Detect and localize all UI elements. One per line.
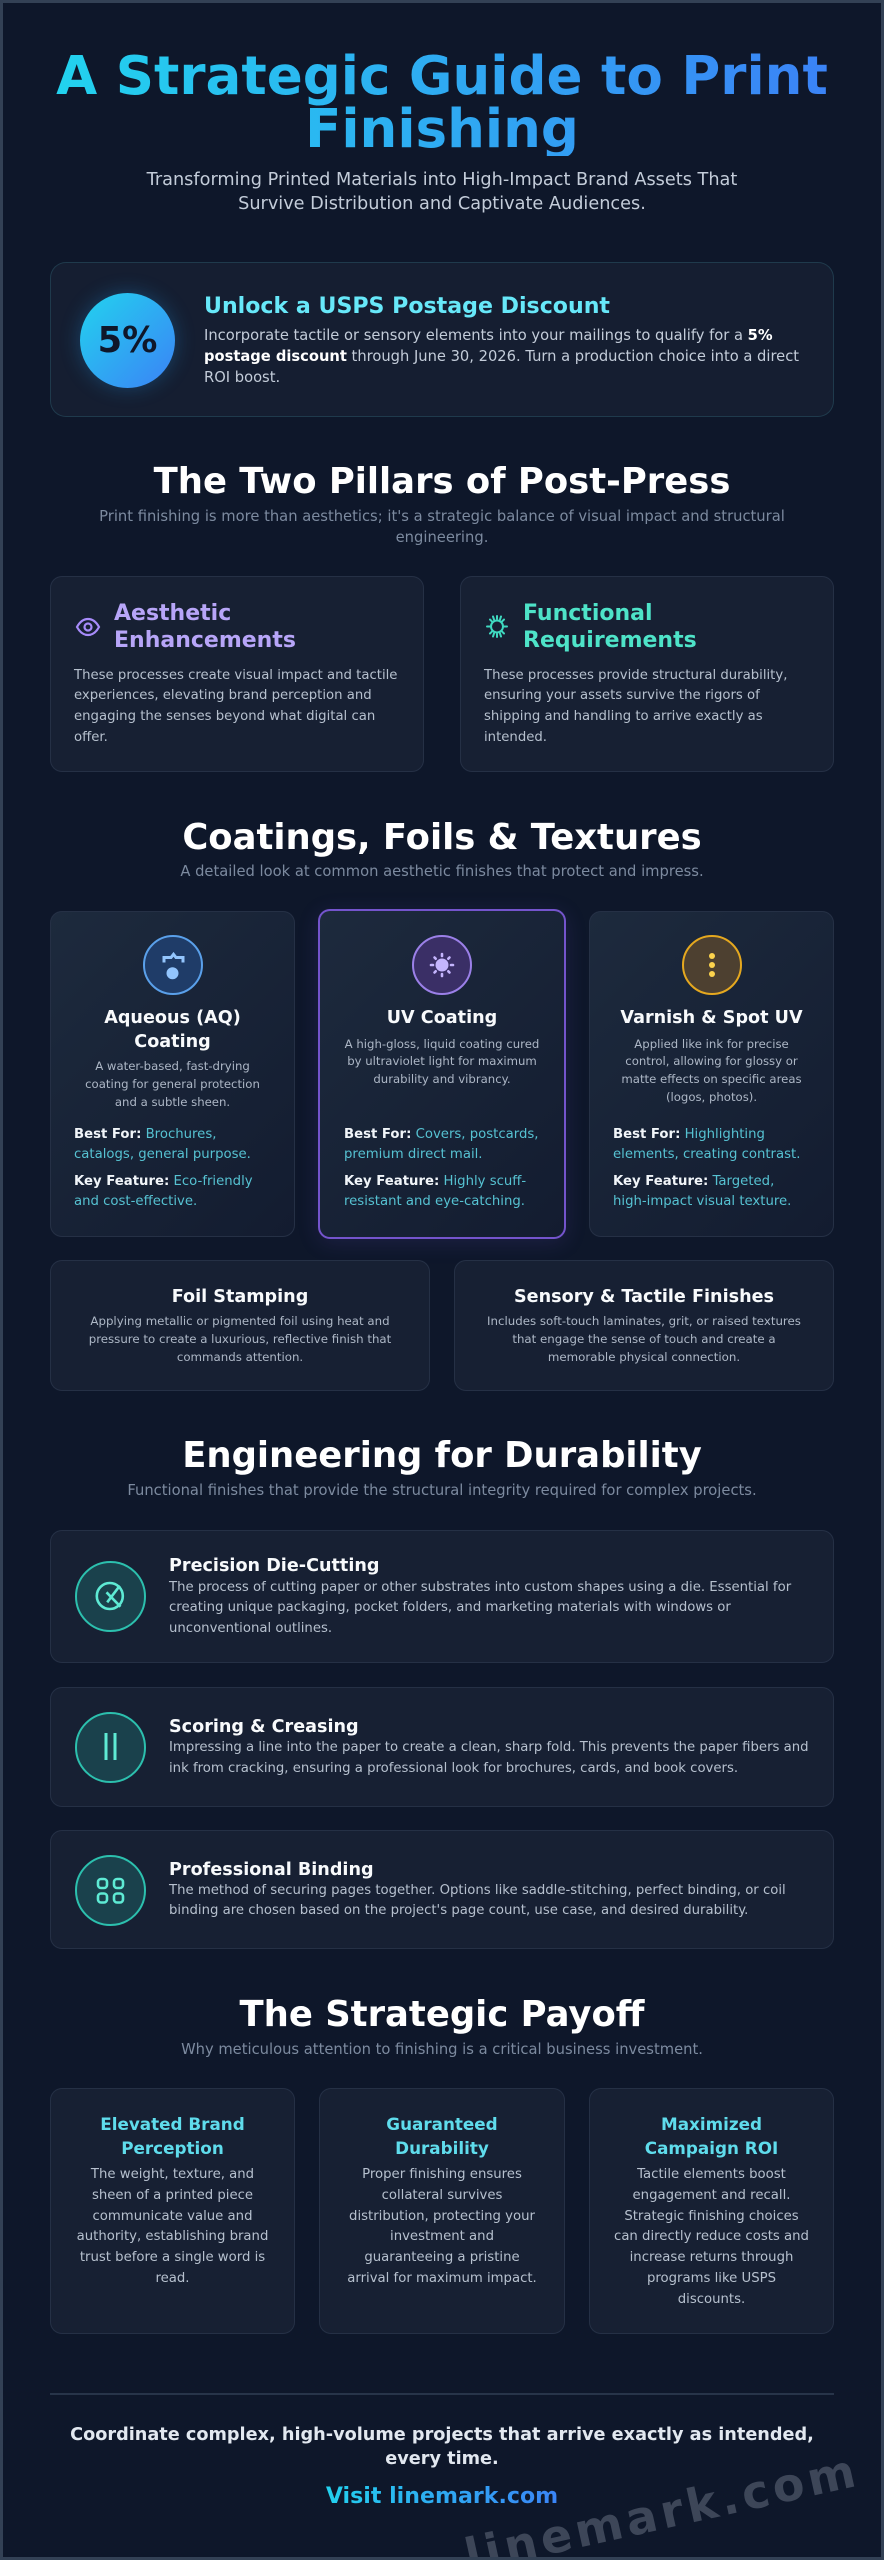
promo text: postage discount through June 30, 2026. Turn a production choice into a direct — [204, 348, 799, 365]
best for: premium direct mail. — [344, 1147, 483, 1162]
benefit text: engagement and recall. — [633, 2188, 790, 2203]
benefit text: discounts. — [678, 2292, 745, 2307]
card description: A water-based, fast-drying — [95, 1059, 250, 1073]
badge: 5 percent: 5% — [98, 320, 157, 361]
closing statement: every time. — [385, 2449, 499, 2469]
pillar text: These processes create visual impact and tactile — [74, 668, 397, 683]
pillar heading: Enhancements — [114, 628, 296, 652]
card description — [487, 1314, 801, 1364]
card description — [344, 1036, 539, 1086]
item text — [169, 1740, 809, 1776]
card title: UV Coating — [387, 1008, 497, 1028]
pillar heading: Functional — [523, 601, 653, 626]
panel: campaign ROI — [589, 2088, 834, 2334]
section intro: two pillars: Print finishing is more than aesthetics; it's a strategic balance of visual impact and structural — [99, 508, 785, 525]
card description: control, allowing for glossy or — [625, 1054, 798, 1068]
card description: memorable physical connection. — [548, 1350, 740, 1364]
benefit text: guaranteeing a pristine — [364, 2250, 520, 2265]
badge: 5 percent — [80, 293, 175, 388]
pillar text: shipping and handling to arrive exactly as — [484, 709, 763, 724]
item text: binding are chosen based on the project's page count, use case, and desired durability. — [169, 1903, 748, 1918]
benefit text: trust before a single word is — [80, 2250, 265, 2265]
card description: that engage the sense of touch and create a — [512, 1332, 776, 1346]
item text: The method of securing pages together. Options like saddle-stitching, perfect binding, or coil — [169, 1883, 786, 1898]
card description: Includes soft-touch laminates, grit, or raised textures — [487, 1314, 801, 1328]
best for — [344, 1127, 538, 1162]
icon: die cut — [75, 1561, 146, 1632]
panel: USPS postage discount — [50, 262, 834, 417]
benefit text: Proper finishing ensures — [362, 2167, 522, 2182]
card description: pressure to create a luxurious, reflective finish that — [89, 1332, 391, 1346]
best for: Best For: Highlighting — [613, 1127, 765, 1142]
benefit text: investment and — [390, 2229, 494, 2244]
promo heading: Unlock a USPS Postage Discount — [204, 293, 610, 319]
card title: Coating — [134, 1032, 211, 1052]
pillar heading — [114, 601, 296, 652]
panel: scoring — [50, 1687, 834, 1807]
pillar text — [74, 668, 397, 745]
key feature — [613, 1174, 791, 1209]
card title: Foil Stamping — [172, 1287, 308, 1307]
panel: functional requirements — [460, 576, 834, 772]
best for — [613, 1127, 800, 1162]
icon: eye — [76, 618, 100, 636]
benefit title — [386, 2114, 498, 2158]
pillar text: intended. — [484, 730, 547, 745]
title — [50, 50, 834, 156]
section intro: two pillars — [99, 508, 785, 546]
benefit title: Guaranteed — [386, 2114, 498, 2134]
item text: The process of cutting paper or other substrates into custom shapes using a die. Essential for — [169, 1580, 791, 1595]
key feature: Key Feature: Highly scuff- — [344, 1174, 526, 1189]
benefit text: The weight, texture, and — [91, 2167, 254, 2182]
promo text: ROI boost. — [204, 369, 280, 386]
call to action: Visit linemark.com — [326, 2483, 558, 2509]
item title: Professional Binding — [169, 1860, 374, 1880]
benefit title: Elevated Brand — [100, 2114, 245, 2134]
benefit text: collateral survives — [382, 2188, 502, 2203]
best for: Best For: Covers, postcards, — [344, 1127, 538, 1142]
key feature: Key Feature: Targeted, — [613, 1174, 774, 1189]
panel: die-cutting — [50, 1530, 834, 1663]
benefit text: read. — [155, 2271, 190, 2286]
icon: sun — [412, 935, 472, 995]
card description: matte effects on specific areas — [621, 1072, 802, 1086]
panel: aqueous coating — [50, 911, 295, 1237]
subtitle — [146, 170, 737, 214]
item text: ink from cracking, ensuring a professional look for brochures, cards, and book covers. — [169, 1761, 738, 1776]
benefit text — [347, 2167, 537, 2286]
benefit text: sheen of a printed piece — [92, 2188, 253, 2203]
section intro: payoff: Why meticulous attention to finishing is a critical business investment. — [181, 2040, 703, 2058]
pillar text: These processes provide structural durability, — [484, 668, 787, 683]
benefit text: programs like USPS — [647, 2271, 776, 2286]
pillar text: offer. — [74, 730, 108, 745]
panel: sensory finishes — [454, 1260, 834, 1391]
card description: Applying metallic or pigmented foil using heat and — [90, 1314, 390, 1328]
icon: water — [143, 935, 203, 995]
subtitle: Transforming Printed Materials into High-Impact Brand Assets That — [147, 170, 737, 190]
panel: durability benefit — [319, 2088, 565, 2334]
card description: coating for general protection — [85, 1077, 260, 1091]
benefit text — [77, 2167, 268, 2286]
pillar heading — [523, 601, 697, 652]
key feature — [74, 1174, 253, 1209]
heading: payoff: The Strategic Payoff — [240, 1994, 644, 2035]
card title: Aqueous (AQ) — [104, 1008, 241, 1028]
benefit text: Strategic finishing choices — [624, 2209, 799, 2224]
key feature — [344, 1174, 526, 1209]
benefit text: authority, establishing brand — [77, 2229, 268, 2244]
benefit text: distribution, protecting your — [349, 2209, 535, 2224]
benefit text — [614, 2167, 809, 2307]
key feature: resistant and eye-catching. — [344, 1194, 525, 1209]
pillar text — [484, 668, 787, 745]
card description: (logos, photos). — [666, 1090, 757, 1104]
promo text — [204, 327, 799, 386]
closing statement: Coordinate complex, high-volume projects that arrive exactly as intended, — [70, 2425, 814, 2445]
benefit title: Durability — [395, 2138, 489, 2158]
pillar text: experiences, elevating brand perception and — [74, 688, 372, 703]
best for — [74, 1127, 251, 1162]
benefit text: increase returns through — [630, 2250, 793, 2265]
item text: Impressing a line into the paper to create a clean, sharp fold. This prevents the paper fibers and — [169, 1740, 809, 1755]
icon: crease lines — [75, 1712, 146, 1783]
closing statement — [70, 2425, 814, 2469]
benefit title — [645, 2114, 778, 2158]
benefit text: can directly reduce costs and — [614, 2229, 809, 2244]
benefit text: Tactile elements boost — [637, 2167, 786, 2182]
card title: Sensory & Tactile Finishes — [514, 1287, 774, 1307]
item text — [168, 1580, 792, 1636]
key feature: and cost-effective. — [74, 1194, 197, 1209]
key feature: high-impact visual texture. — [613, 1194, 791, 1209]
item title: Scoring & Creasing — [169, 1717, 359, 1737]
panel: foil stamping — [50, 1260, 430, 1391]
pillar heading: Aesthetic — [114, 601, 231, 626]
card description: Applied like ink for precise — [634, 1036, 789, 1050]
panel: varnish and spot UV — [589, 911, 834, 1237]
benefit title — [100, 2114, 245, 2158]
icon: dots — [682, 935, 742, 995]
benefit text: arrival for maximum impact. — [347, 2271, 537, 2286]
best for: catalogs, general purpose. — [74, 1147, 251, 1162]
pillar text: engaging the senses beyond what digital can — [74, 709, 375, 724]
card description: and a subtle sheen. — [115, 1095, 230, 1109]
section intro: two pillars: engineering. — [396, 529, 488, 546]
panel: brand perception — [50, 2088, 295, 2334]
item text: creating unique packaging, pocket folders, and marketing materials with windows or — [169, 1600, 731, 1615]
pillar heading: Requirements — [523, 628, 697, 652]
icon: gear — [486, 615, 508, 638]
section intro: durability: Functional finishes that provide the structural integrity required for complex projects. — [127, 1482, 757, 1498]
card title: Varnish & Spot UV — [620, 1008, 803, 1028]
card title — [104, 1008, 241, 1052]
item text: unconventional outlines. — [169, 1621, 332, 1636]
heading: coatings: Coatings, Foils & Textures — [182, 817, 702, 858]
benefit title: Maximized — [661, 2114, 762, 2134]
panel: aesthetic enhancements — [50, 576, 424, 772]
card description — [85, 1059, 260, 1109]
title: Finishing — [305, 98, 579, 160]
item title: Precision Die-Cutting — [169, 1556, 379, 1576]
benefit text: communicate value and — [92, 2209, 252, 2224]
title: A Strategic Guide to Print — [56, 44, 828, 106]
card description: by ultraviolet light for maximum — [347, 1054, 537, 1068]
best for: elements, creating contrast. — [613, 1147, 800, 1162]
heading: two pillars: The Two Pillars of Post-Press — [154, 461, 730, 502]
card description — [89, 1314, 391, 1364]
promo text: Incorporate tactile or sensory elements into your mailings to qualify for a 5% — [204, 327, 773, 344]
heading: durability: Engineering for Durability — [182, 1435, 702, 1476]
panel: binding — [50, 1830, 834, 1949]
pillar text: ensuring your assets survive the rigors of — [484, 688, 760, 703]
section intro: coatings: A detailed look at common aesthetic finishes that protect and impress. — [180, 863, 704, 880]
benefit title: Perception — [121, 2138, 224, 2158]
subtitle: Survive Distribution and Captivate Audiences. — [238, 194, 646, 214]
panel: UV coating — [318, 909, 566, 1239]
benefit title: Campaign ROI — [645, 2138, 778, 2158]
best for: Best For: Brochures, — [74, 1127, 216, 1142]
icon: binding grid — [75, 1855, 146, 1926]
item text — [168, 1883, 786, 1918]
key feature: Key Feature: Eco-friendly — [74, 1174, 253, 1189]
card description — [621, 1036, 802, 1104]
card description: durability and vibrancy. — [373, 1072, 511, 1086]
card description: commands attention. — [177, 1350, 303, 1364]
card description: A high-gloss, liquid coating cured — [345, 1036, 539, 1050]
